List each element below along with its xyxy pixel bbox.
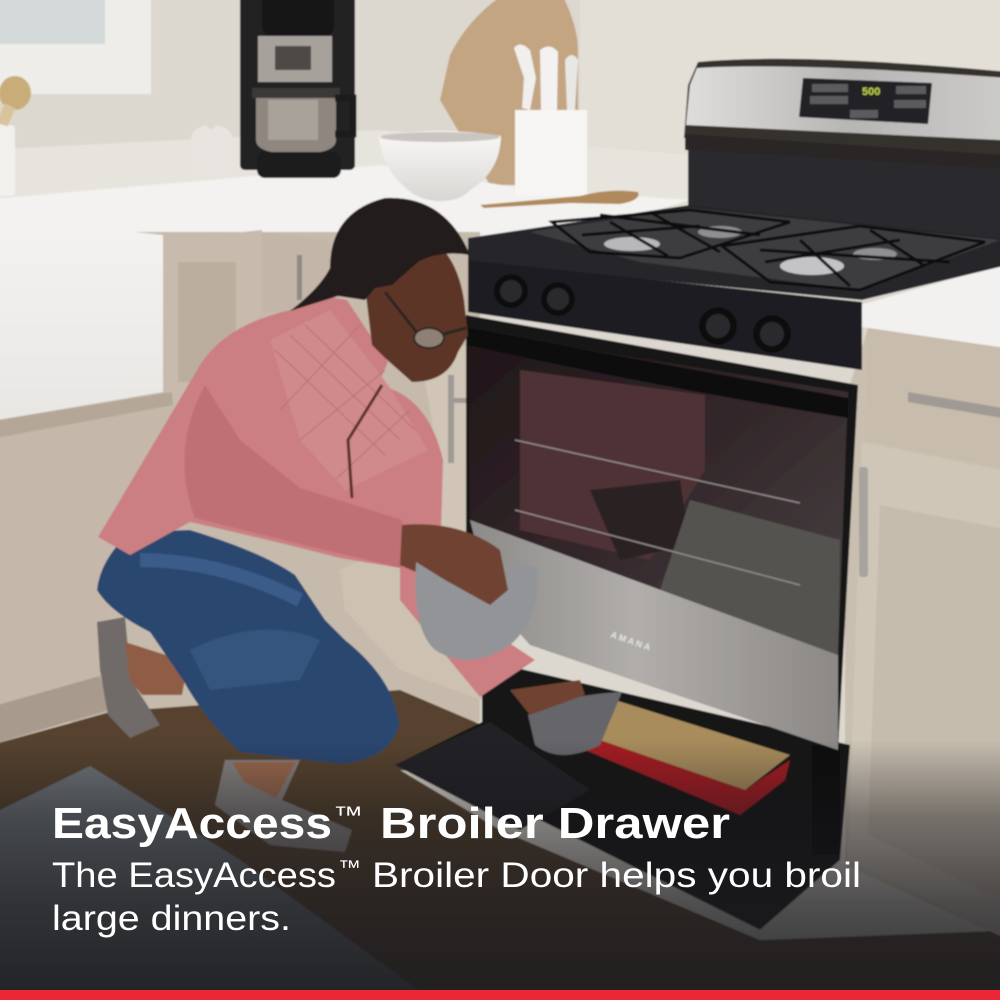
cutting board (440, 0, 578, 185)
title: Broiler Drawer (380, 799, 730, 848)
countertop (0, 165, 690, 242)
range: oven door: AMANA (609, 629, 654, 653)
range: oven door (466, 315, 858, 750)
sink (0, 216, 163, 423)
title (52, 799, 730, 848)
description text: Broiler Door helps you broil (372, 855, 861, 895)
rug (0, 766, 460, 1000)
white bowl (379, 131, 501, 201)
description text: large dinners. (52, 898, 291, 938)
range: backguard (684, 59, 1000, 242)
title: EasyAccess (52, 799, 332, 848)
head and hair (366, 225, 468, 382)
floor (0, 690, 1000, 1000)
wooden spoon (480, 191, 639, 208)
sugar pot (191, 121, 233, 176)
cabinet behind woman (340, 345, 482, 700)
display panel: 500 (862, 86, 880, 98)
coffee maker (240, 0, 355, 178)
window (0, 0, 151, 94)
broiler drawer and pan (395, 660, 850, 930)
sweater (98, 297, 535, 697)
bottom dark gradient overlay (0, 740, 1000, 990)
display panel (799, 78, 932, 124)
red bottom bar (0, 990, 1000, 1000)
utensil crock (514, 44, 587, 196)
description text: The EasyAccess (52, 855, 336, 895)
range: cooktop and grates (468, 205, 1000, 300)
lower cabinets left (0, 230, 480, 748)
brush and jar (0, 76, 31, 196)
hand and pot holder (400, 524, 510, 612)
right countertop (860, 260, 1000, 350)
description text: ™ (338, 857, 361, 879)
right cabinets (845, 328, 1000, 945)
description text (52, 855, 861, 938)
woman (97, 198, 585, 852)
range: control fascia and knobs (468, 260, 862, 370)
title: ™ (333, 802, 363, 829)
shoes and jeans (97, 530, 399, 852)
